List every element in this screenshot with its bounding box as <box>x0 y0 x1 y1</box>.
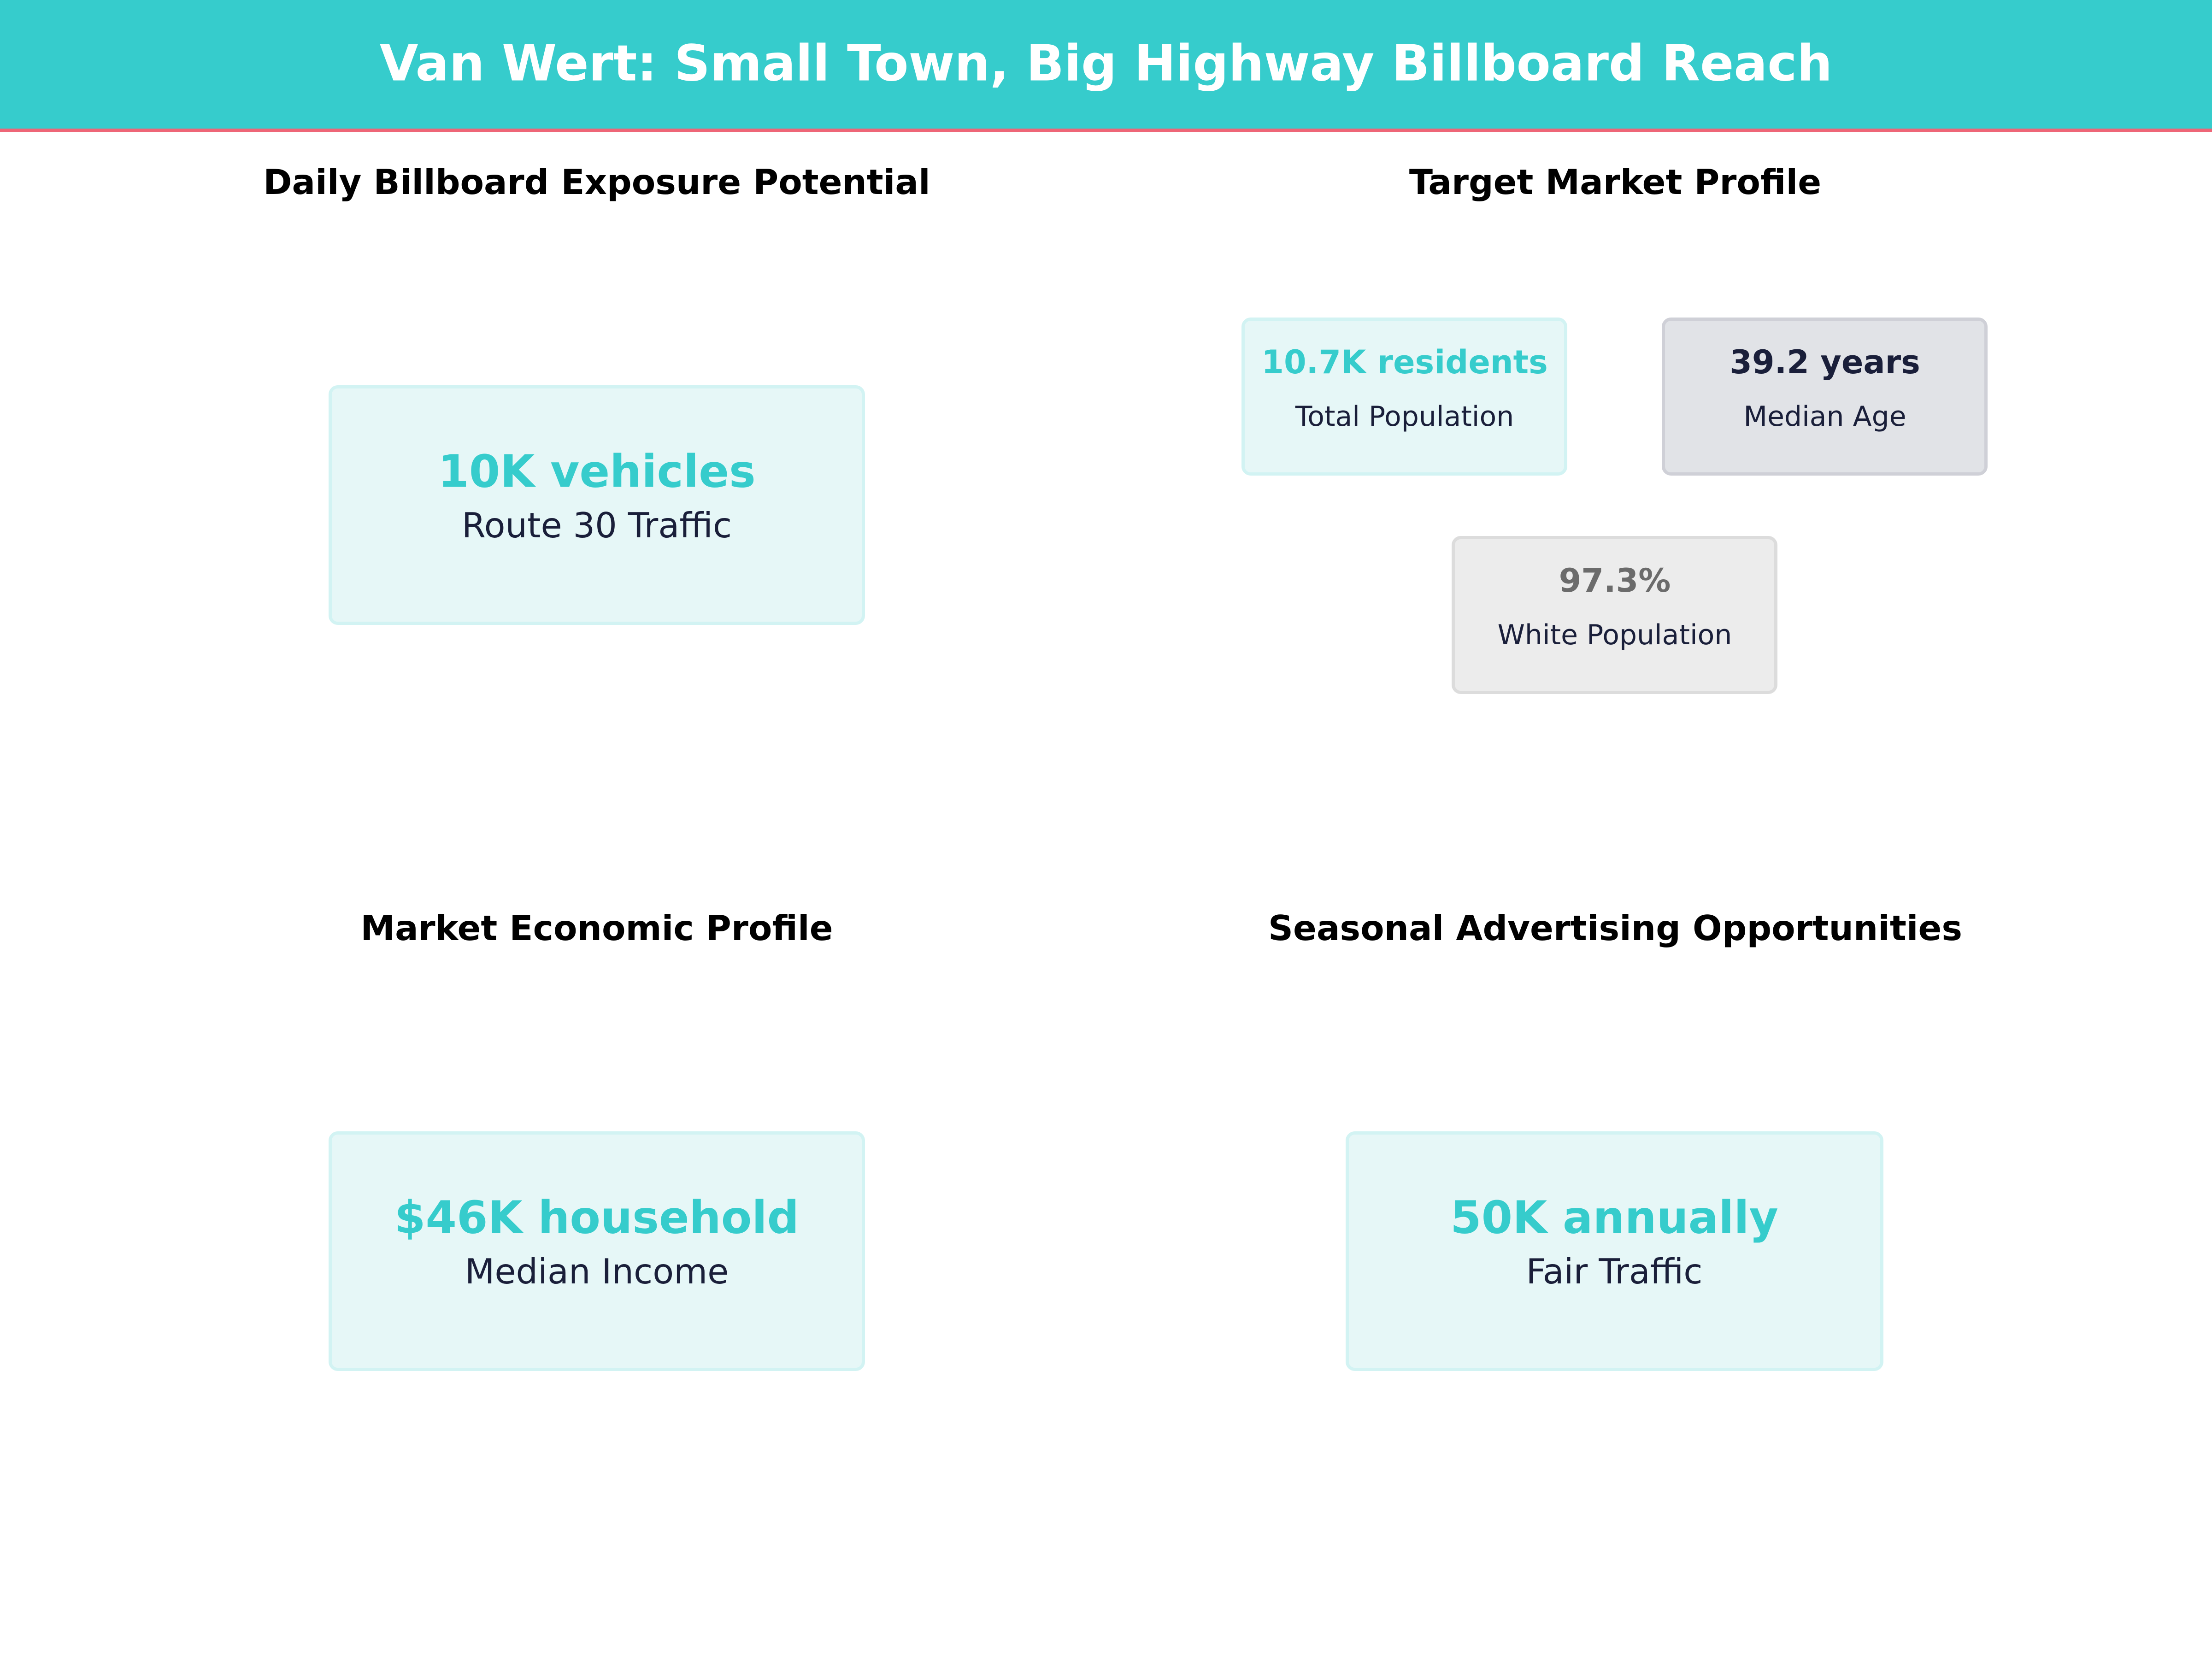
heading: seasonal: Seasonal Advertising Opportunities <box>1268 908 1962 948</box>
card: median income: Median Income <box>465 1251 729 1292</box>
card: white population: 97.3% <box>1559 562 1671 600</box>
heading: economic profile: Market Economic Profile <box>360 908 833 948</box>
card: fair traffic: 50K annually <box>1450 1192 1778 1243</box>
card: fair traffic: Fair Traffic <box>1526 1251 1703 1292</box>
card: median age <box>1662 318 1988 476</box>
card: median income: $46K household <box>394 1192 799 1243</box>
header banner <box>0 0 2212 132</box>
card: white population: White Population <box>1498 619 1732 651</box>
card: median income <box>329 1131 865 1371</box>
card: fair traffic <box>1346 1131 1883 1371</box>
title: Van Wert: Small Town, Big Highway Billboard Reach <box>380 35 1832 92</box>
heading: daily exposure: Daily Billboard Exposure Potential <box>263 162 930 202</box>
card: total population <box>1241 318 1567 476</box>
heading: target market: Target Market Profile <box>1409 162 1821 202</box>
card: total population: 10.7K residents <box>1261 343 1548 381</box>
card: median age: 39.2 years <box>1730 343 1920 381</box>
card: route 30 traffic: Route 30 Traffic <box>462 505 732 546</box>
card: white population <box>1452 536 1777 694</box>
card: route 30 traffic <box>329 385 865 625</box>
card: route 30 traffic: 10K vehicles <box>438 445 756 498</box>
card: median age: Median Age <box>1743 400 1906 433</box>
card: total population: Total Population <box>1295 400 1514 433</box>
